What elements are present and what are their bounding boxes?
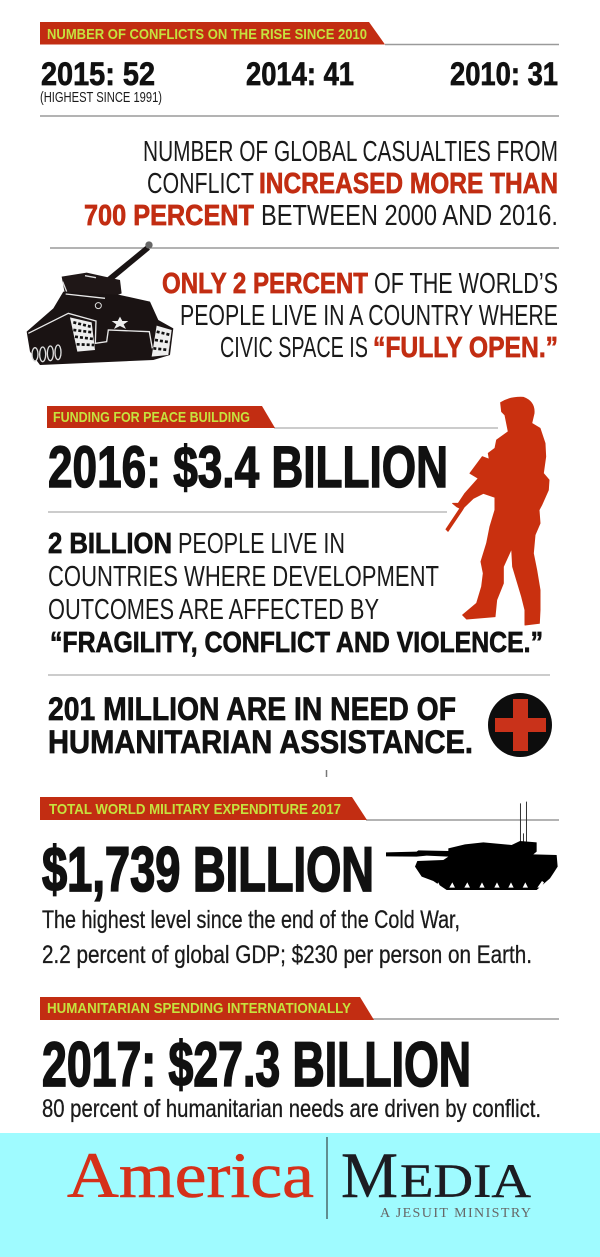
heading: military spending total: $1,739 BILLION bbox=[42, 835, 374, 905]
footer: America Media logo: EDIA bbox=[400, 1155, 531, 1208]
stat: 2015: 2015: 52 bbox=[41, 56, 155, 92]
text block: 2 billion people: 2 BILLION bbox=[48, 528, 172, 560]
text block: global casualties bbox=[84, 136, 558, 232]
icon: sherman tank bbox=[27, 241, 173, 365]
text block: civic space: CIVIC SPACE IS bbox=[220, 332, 368, 364]
text block: global casualties: 700 PERCENT bbox=[84, 200, 254, 232]
stat: 2014: 2014: 41 bbox=[246, 56, 354, 92]
text block: humanitarian assistance bbox=[48, 691, 473, 760]
banner: number of conflicts bbox=[40, 22, 385, 44]
text block: cold war comparison: The highest level since the end of the Cold War, bbox=[42, 906, 460, 934]
footer: America Media logo: A JESUIT MINISTRY bbox=[380, 1206, 531, 1221]
banner: military expenditure bbox=[40, 797, 367, 820]
stat: 2015: (HIGHEST SINCE 1991) bbox=[40, 89, 162, 106]
banner: military expenditure: TOTAL WORLD MILITARY EXPENDITURE 2017 bbox=[49, 801, 341, 818]
text block: 2 billion people: OUTCOMES ARE AFFECTED BY bbox=[48, 594, 379, 626]
icon: red cross badge bbox=[488, 693, 552, 757]
text block: cold war comparison bbox=[42, 906, 532, 969]
text block: civic space: ONLY 2 PERCENT bbox=[162, 268, 368, 300]
banner: number of conflicts: NUMBER OF CONFLICTS ON THE RISE SINCE 2010 bbox=[47, 26, 367, 43]
text block: humanitarian assistance: 201 MILLION ARE IN NEED OF bbox=[48, 691, 456, 727]
text block: civic space: “FULLY OPEN.” bbox=[373, 332, 558, 364]
text block: humanitarian assistance: HUMANITARIAN ASSISTANCE. bbox=[48, 724, 473, 760]
stat: 2010: 2010: 31 bbox=[450, 56, 558, 92]
heading: 2016 funding: 2016: $3.4 BILLION bbox=[48, 435, 448, 500]
text block: 2 billion people: PEOPLE LIVE IN bbox=[178, 528, 345, 560]
icon: soldier silhouette bbox=[446, 397, 549, 625]
banner: funding for peace building: FUNDING FOR PEACE BUILDING bbox=[53, 409, 250, 426]
banner: humanitarian spending: HUMANITARIAN SPENDING INTERNATIONALLY bbox=[47, 1000, 351, 1017]
panel: conflicts on the rise bbox=[40, 22, 558, 106]
footer: America Media logo bbox=[0, 1133, 600, 1257]
footer: America Media logo: America bbox=[67, 1140, 314, 1212]
icon: modern tank silhouette bbox=[386, 802, 558, 890]
text block: civic space bbox=[162, 268, 558, 364]
text block: global casualties: CONFLICT bbox=[147, 168, 254, 200]
text block: 2 billion people: COUNTRIES WHERE DEVELOPMENT bbox=[48, 561, 439, 593]
footer: America Media logo: M bbox=[341, 1140, 398, 1212]
text block: 2 billion people bbox=[48, 528, 543, 659]
stat: 2015 bbox=[40, 56, 162, 106]
